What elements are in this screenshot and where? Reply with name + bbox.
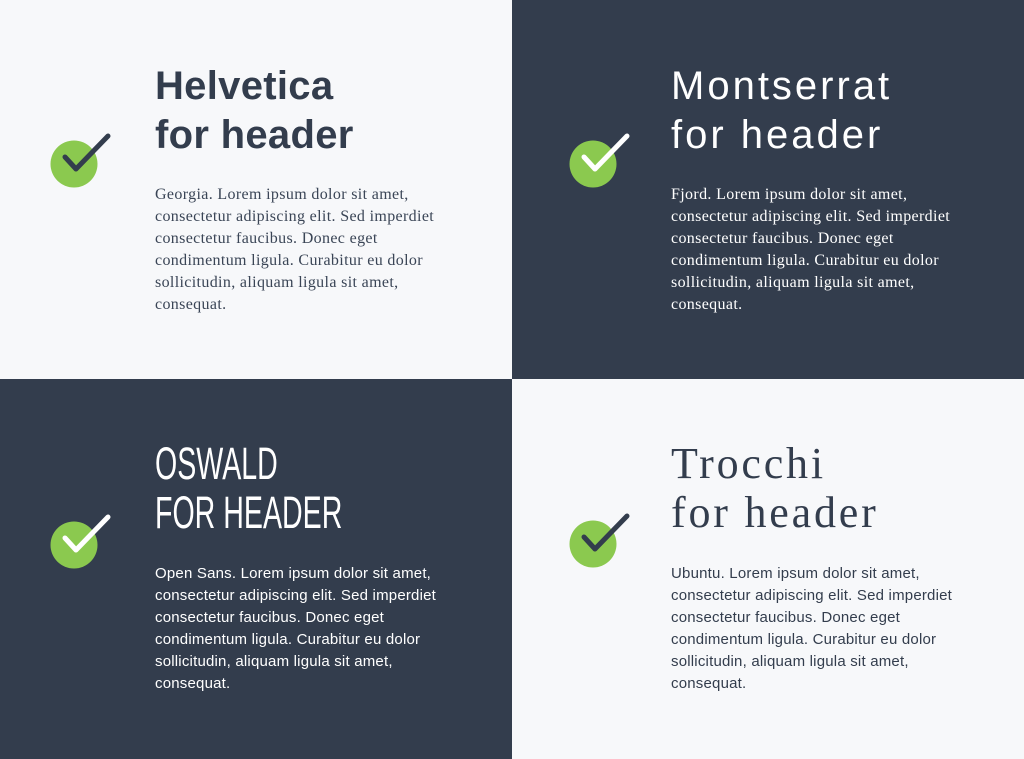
- heading: FOR HEADER: [155, 487, 342, 538]
- body text: sollicitudin, aliquam ligula sit amet,: [155, 274, 398, 291]
- body text: consectetur adipiscing elit. Sed imperdiet: [155, 208, 434, 225]
- body text: consectetur faucibus. Donec eget: [671, 230, 894, 247]
- body text: consectetur faucibus. Donec eget: [671, 609, 900, 626]
- body text: consequat.: [155, 675, 230, 692]
- panel: Trocchi: [512, 379, 1024, 759]
- body text: consequat.: [155, 296, 226, 313]
- heading: OSWALD: [155, 438, 278, 489]
- body text: Open Sans. Lorem ipsum dolor sit amet,: [155, 565, 431, 582]
- body text: consequat.: [671, 675, 746, 692]
- heading: Trocchi: [671, 439, 826, 488]
- icon: check: [570, 134, 630, 188]
- body text: [155, 565, 436, 692]
- panel: Oswald: [0, 379, 512, 759]
- body text: consequat.: [671, 296, 742, 313]
- icon: check: [50, 514, 110, 568]
- heading: Helvetica: [155, 64, 333, 108]
- body text: condimentum ligula. Curabitur eu dolor: [155, 631, 420, 648]
- heading: for header: [155, 113, 354, 157]
- body text: Ubuntu. Lorem ipsum dolor sit amet,: [671, 565, 920, 582]
- body text: consectetur adipiscing elit. Sed imperdiet: [671, 208, 950, 225]
- body text: condimentum ligula. Curabitur eu dolor: [671, 252, 939, 269]
- body text: consectetur adipiscing elit. Sed imperdiet: [155, 587, 436, 604]
- body text: [671, 186, 950, 313]
- body text: [671, 565, 952, 692]
- body text: Georgia. Lorem ipsum dolor sit amet,: [155, 186, 409, 203]
- body text: sollicitudin, aliquam ligula sit amet,: [671, 274, 914, 291]
- body text: consectetur faucibus. Donec eget: [155, 609, 384, 626]
- body text: consectetur faucibus. Donec eget: [155, 230, 378, 247]
- body text: condimentum ligula. Curabitur eu dolor: [155, 252, 423, 269]
- heading: for header: [671, 488, 879, 537]
- heading: for header: [671, 113, 883, 157]
- icon: check: [570, 514, 630, 568]
- body text: [155, 186, 434, 313]
- heading: [671, 64, 892, 157]
- body text: consectetur adipiscing elit. Sed imperdiet: [671, 587, 952, 604]
- heading: [155, 438, 342, 538]
- panel: Helvetica: [0, 0, 512, 380]
- heading: [155, 64, 354, 157]
- body text: sollicitudin, aliquam ligula sit amet,: [155, 653, 393, 670]
- icon: check: [50, 134, 110, 188]
- heading: Montserrat: [671, 64, 892, 108]
- heading: [671, 439, 879, 537]
- body text: condimentum ligula. Curabitur eu dolor: [671, 631, 936, 648]
- body text: sollicitudin, aliquam ligula sit amet,: [671, 653, 909, 670]
- panel: Montserrat: [512, 0, 1024, 380]
- body text: Fjord. Lorem ipsum dolor sit amet,: [671, 186, 907, 203]
